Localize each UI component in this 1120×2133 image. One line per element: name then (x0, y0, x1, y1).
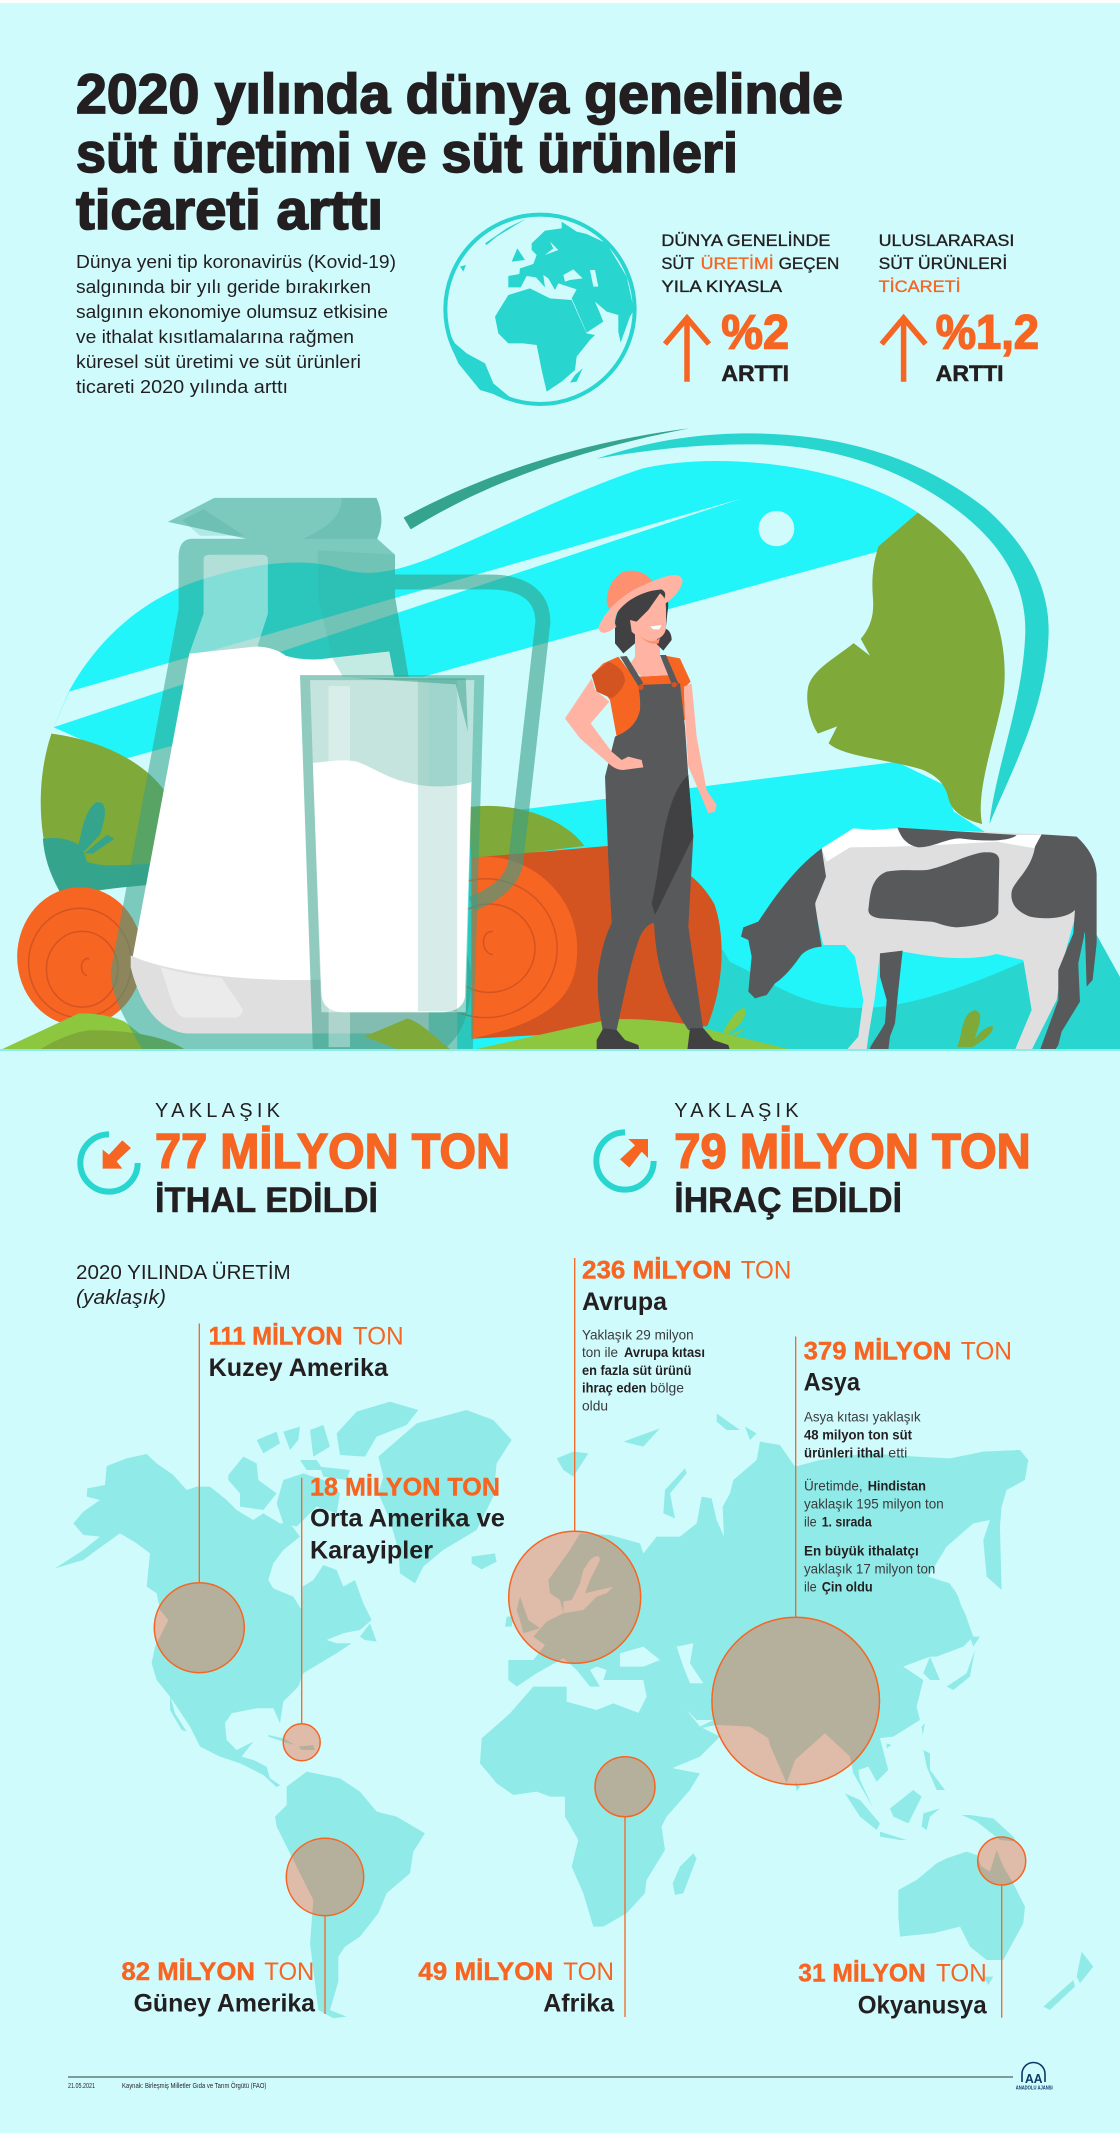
label: north america: 111 MİLYON (209, 1322, 343, 1350)
icon: import arrow (80, 1134, 138, 1192)
stat: production (661, 231, 839, 386)
icon: export arrow (596, 1132, 654, 1190)
label: central america: Orta Amerika ve (310, 1505, 505, 1533)
label: central america: Karayipler (310, 1536, 433, 1564)
label: europe: 236 MİLYON (582, 1257, 731, 1285)
cow (741, 828, 1097, 1050)
export block: İHRAÇ EDİLDİ (674, 1181, 902, 1220)
bubble: central america (283, 1478, 320, 1761)
label: south america: TON (264, 1958, 314, 1986)
title: süt üretimi ve süt ürünleri (76, 121, 738, 184)
hills, hay and jug (0, 498, 993, 1050)
footer: Kaynak: Birleşmiş Milletler Gıda ve Tarım Örgütü (FAO) (122, 2081, 267, 2090)
stat: production: DÜNYA GENELİNDE (661, 231, 830, 250)
stat: trade: SÜT ÜRÜNLERİ (879, 254, 1007, 273)
arrow up (882, 318, 926, 382)
intro text: salgınında bir yılı geride bırakırken (76, 277, 371, 297)
icon: globe (445, 215, 635, 404)
logo: Anadolu Ajansı: ANADOLU AJANSI (1016, 2086, 1053, 2092)
label: africa: Afrika (543, 1990, 615, 2018)
base line of scene (0, 1049, 1120, 1051)
intro text: ticareti 2020 yılında arttı (76, 377, 288, 397)
production heading: (yaklaşık) (76, 1287, 166, 1309)
production heading (76, 1261, 291, 1309)
stat: production: ARTTI (721, 361, 789, 386)
label: asia: TON (961, 1338, 1012, 1366)
import block: İTHAL EDİLDİ (155, 1181, 378, 1220)
stat: trade: TİCARETİ (879, 277, 961, 296)
asia note: 48 milyon ton süt (804, 1426, 912, 1442)
bubble: north america (154, 1324, 244, 1673)
label: oceania: TON (936, 1960, 987, 1988)
north america (55, 1402, 512, 1787)
asia note: yaklaşık 17 milyon ton (804, 1560, 935, 1576)
intro text: Dünya yeni tip koronavirüs (Kovid-19) (76, 252, 396, 272)
label: asia: Asya (804, 1369, 861, 1397)
label: europe: Avrupa (582, 1288, 668, 1316)
south america and africa (275, 1687, 700, 2018)
label: oceania: Okyanusya (858, 1991, 988, 2019)
asia note: Hindistan (868, 1478, 926, 1494)
stat: production: %2 (721, 306, 789, 359)
bubble: africa (595, 1757, 655, 2017)
label: central america (310, 1474, 505, 1564)
arrow up (665, 318, 709, 382)
stat: production: SÜT (661, 254, 694, 273)
label: north america: Kuzey Amerika (209, 1354, 389, 1382)
europe note: ton ile (582, 1344, 618, 1360)
title: 2020 yılında dünya genelinde (76, 62, 843, 125)
label: oceania: 31 MİLYON (798, 1960, 926, 1988)
asia note: Üretimde, (804, 1477, 863, 1494)
export block: YAKLAŞIK (674, 1100, 799, 1122)
asia note (804, 1409, 944, 1594)
title: ticareti arttı (76, 178, 383, 241)
import block (80, 1100, 510, 1220)
intro text: ve ithalat kısıtlamalarına rağmen (76, 327, 354, 347)
stat: production: YILA KIYASLA (661, 277, 783, 296)
label: oceania (798, 1960, 988, 2019)
label: central america: 18 MİLYON TON (310, 1474, 500, 1502)
asia note: etti (888, 1444, 907, 1460)
label: asia: 379 MİLYON (804, 1338, 951, 1366)
bubble: oceania (978, 1837, 1026, 2018)
teal hill (700, 932, 1120, 1050)
stat: trade: ARTTI (936, 361, 1004, 386)
eurasia (500, 1413, 1028, 1808)
europe note: ihraç eden (582, 1380, 646, 1396)
asia note: ile (804, 1578, 817, 1594)
label: north america: TON (353, 1322, 404, 1350)
asia note: 1. sırada (822, 1513, 872, 1529)
europe note: Avrupa kıtası (624, 1344, 705, 1360)
southeast asia and oceania (795, 1723, 1093, 2010)
europe note: Yaklaşık 29 milyon (582, 1327, 694, 1343)
world map (55, 1402, 1093, 2018)
stat: trade: %1,2 (936, 306, 1039, 359)
bubble: south america (286, 1838, 364, 2014)
jug (111, 498, 543, 1050)
footer (68, 2062, 1053, 2092)
intro text: salgının ekonomiye olumsuz etkisine (76, 302, 388, 322)
export block: 79 MİLYON TON (674, 1125, 1031, 1179)
asia note: En büyük ithalatçı (804, 1543, 919, 1559)
asia note: ile (804, 1513, 817, 1529)
logo: Anadolu Ajansı: AA (1025, 2071, 1043, 2086)
stat: production: GEÇEN (779, 254, 839, 273)
asia note: yaklaşık 195 milyon ton (804, 1495, 944, 1511)
asia note: Çin oldu (822, 1578, 873, 1594)
label: south america (121, 1958, 316, 2017)
import block: 77 MİLYON TON (155, 1125, 510, 1179)
europe note: oldu (582, 1398, 608, 1414)
label: south america: Güney Amerika (134, 1989, 316, 2017)
footer: 21.05.2021 (68, 2081, 95, 2090)
stat: production: ÜRETİMİ (701, 254, 774, 273)
asia note: Asya kıtası yaklaşık (804, 1409, 922, 1425)
glass (300, 675, 484, 1050)
label: north america (209, 1322, 404, 1382)
label: asia (804, 1338, 1012, 1594)
asia note: ürünleri ithal (804, 1444, 884, 1460)
intro text (76, 252, 396, 397)
intro text: küresel süt üretimi ve süt ürünleri (76, 352, 361, 372)
illustration: milk farm scene (0, 428, 1120, 1051)
bubble: asia (712, 1336, 880, 1785)
production heading: 2020 YILINDA ÜRETİM (76, 1261, 291, 1284)
export block (596, 1100, 1031, 1220)
label: europe: TON (741, 1257, 791, 1285)
import block: YAKLAŞIK (155, 1100, 281, 1122)
label: africa (418, 1958, 615, 2018)
europe note: bölge (650, 1380, 684, 1396)
bubble: europe (509, 1258, 641, 1663)
logo: Anadolu Ajansı (1016, 2062, 1053, 2092)
stat: trade: ULUSLARARASI (879, 231, 1014, 250)
background swooshes and sky (54, 428, 1107, 1050)
label: europe (582, 1257, 791, 1414)
europe note (582, 1327, 705, 1414)
europe note: en fazla süt ürünü (582, 1362, 691, 1378)
title (76, 62, 843, 241)
label: south america: 82 MİLYON (121, 1958, 255, 1986)
label: africa: 49 MİLYON (418, 1958, 553, 1986)
woman farmer (565, 571, 730, 1050)
stat: trade (879, 231, 1039, 386)
label: africa: TON (563, 1958, 614, 1986)
